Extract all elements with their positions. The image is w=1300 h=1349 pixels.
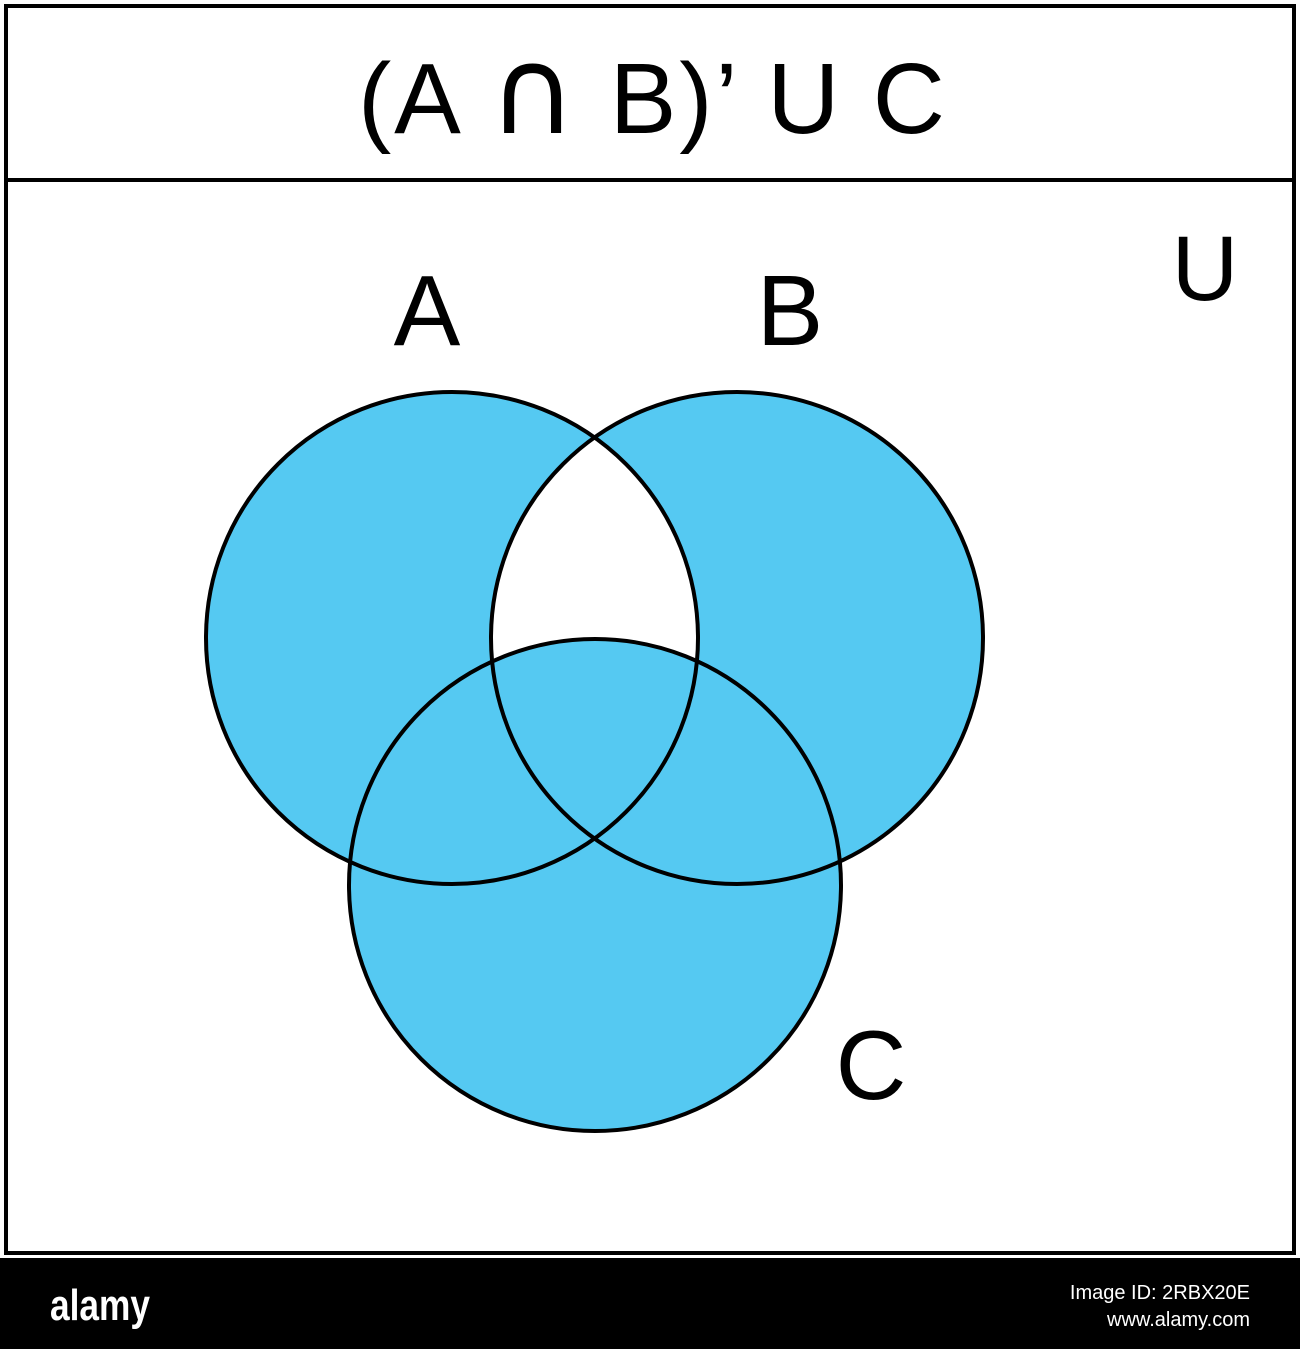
label: A: A (394, 255, 461, 367)
url text: www.alamy.com (1106, 1309, 1250, 1331)
logo: alamy: alamy (50, 1281, 150, 1330)
title: (A ∩ B)' U C: (A ∩ B)’ U C (358, 23, 945, 162)
footer bar (0, 1258, 1300, 1349)
venn circles (206, 392, 983, 1131)
label: B: B (757, 255, 823, 367)
label: C: C (836, 1010, 906, 1120)
image id text: Image ID: 2RBX20E (1070, 1282, 1250, 1304)
label: U: U (1172, 218, 1238, 320)
region: A∩B (unshaded) (493, 440, 696, 658)
